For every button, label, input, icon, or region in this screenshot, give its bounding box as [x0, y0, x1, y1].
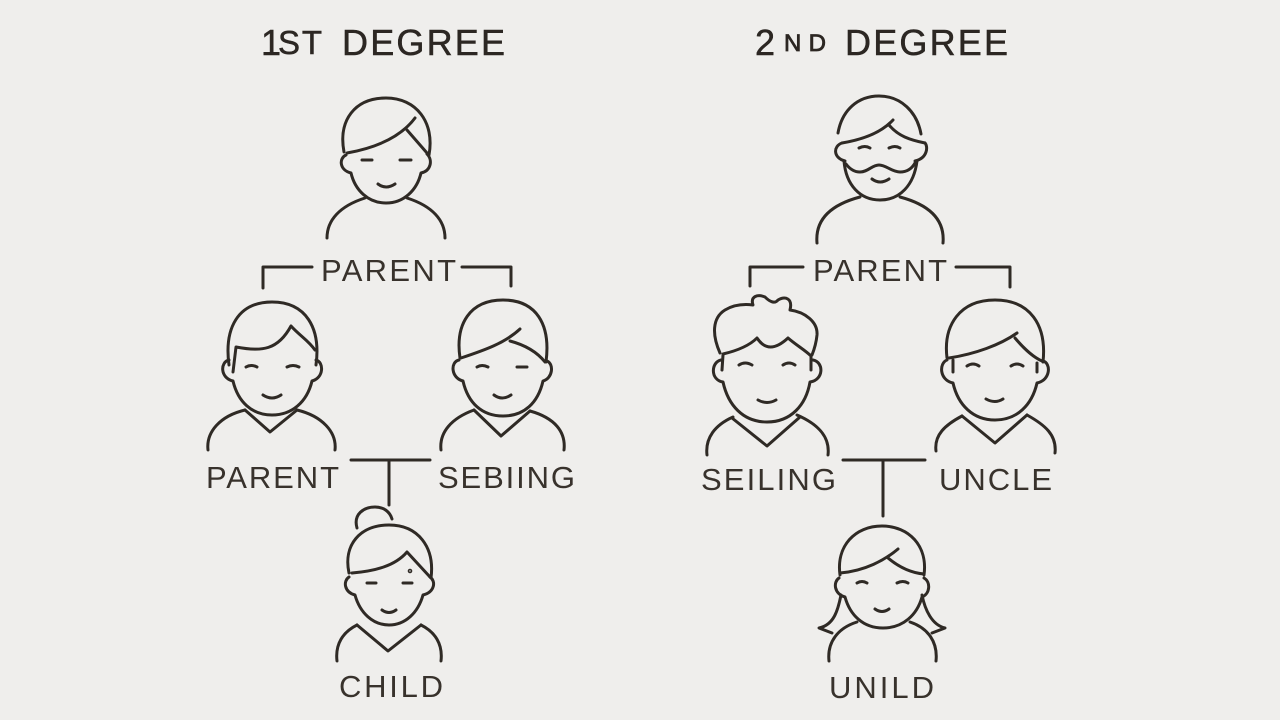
label: unild: UNILD [829, 670, 934, 705]
label: parent, first degree top: PARENT [321, 253, 456, 288]
heading: 1st degree: ST [278, 24, 322, 61]
label: uncle: UNCLE [939, 462, 1052, 497]
label: sibling: SEBIING [438, 460, 575, 495]
heading: 1st degree: 1 [261, 22, 281, 63]
icon: second degree child with long hair [819, 526, 945, 661]
connector: first degree T [351, 460, 430, 505]
heading: 2nd degree: 2 [755, 22, 775, 63]
heading: 2nd degree: ND [784, 30, 826, 57]
label: parent, first degree left: PARENT [206, 460, 339, 495]
icon: first degree sibling [441, 300, 564, 450]
icon: first degree child [337, 507, 441, 661]
heading: 2nd degree [755, 22, 1008, 63]
label: seiling: SEILING [701, 462, 836, 497]
heading: 2nd degree: DEGREE [845, 22, 1008, 63]
label: parent, second degree top: PARENT [813, 253, 947, 288]
heading: 1st degree: DEGREE [342, 22, 505, 63]
connector: second degree T [843, 460, 925, 516]
icon: second degree curly-haired sibling [707, 296, 828, 455]
icon: second degree bearded parent [817, 96, 943, 243]
label: child: CHILD [339, 669, 443, 704]
icon: second degree uncle [936, 300, 1055, 453]
connector: second degree bracket [750, 267, 1010, 287]
icon: first degree top parent [327, 98, 445, 238]
icon: first degree left parent [208, 302, 335, 450]
heading: 1st degree [261, 22, 505, 63]
connector: first degree bracket [263, 267, 511, 288]
